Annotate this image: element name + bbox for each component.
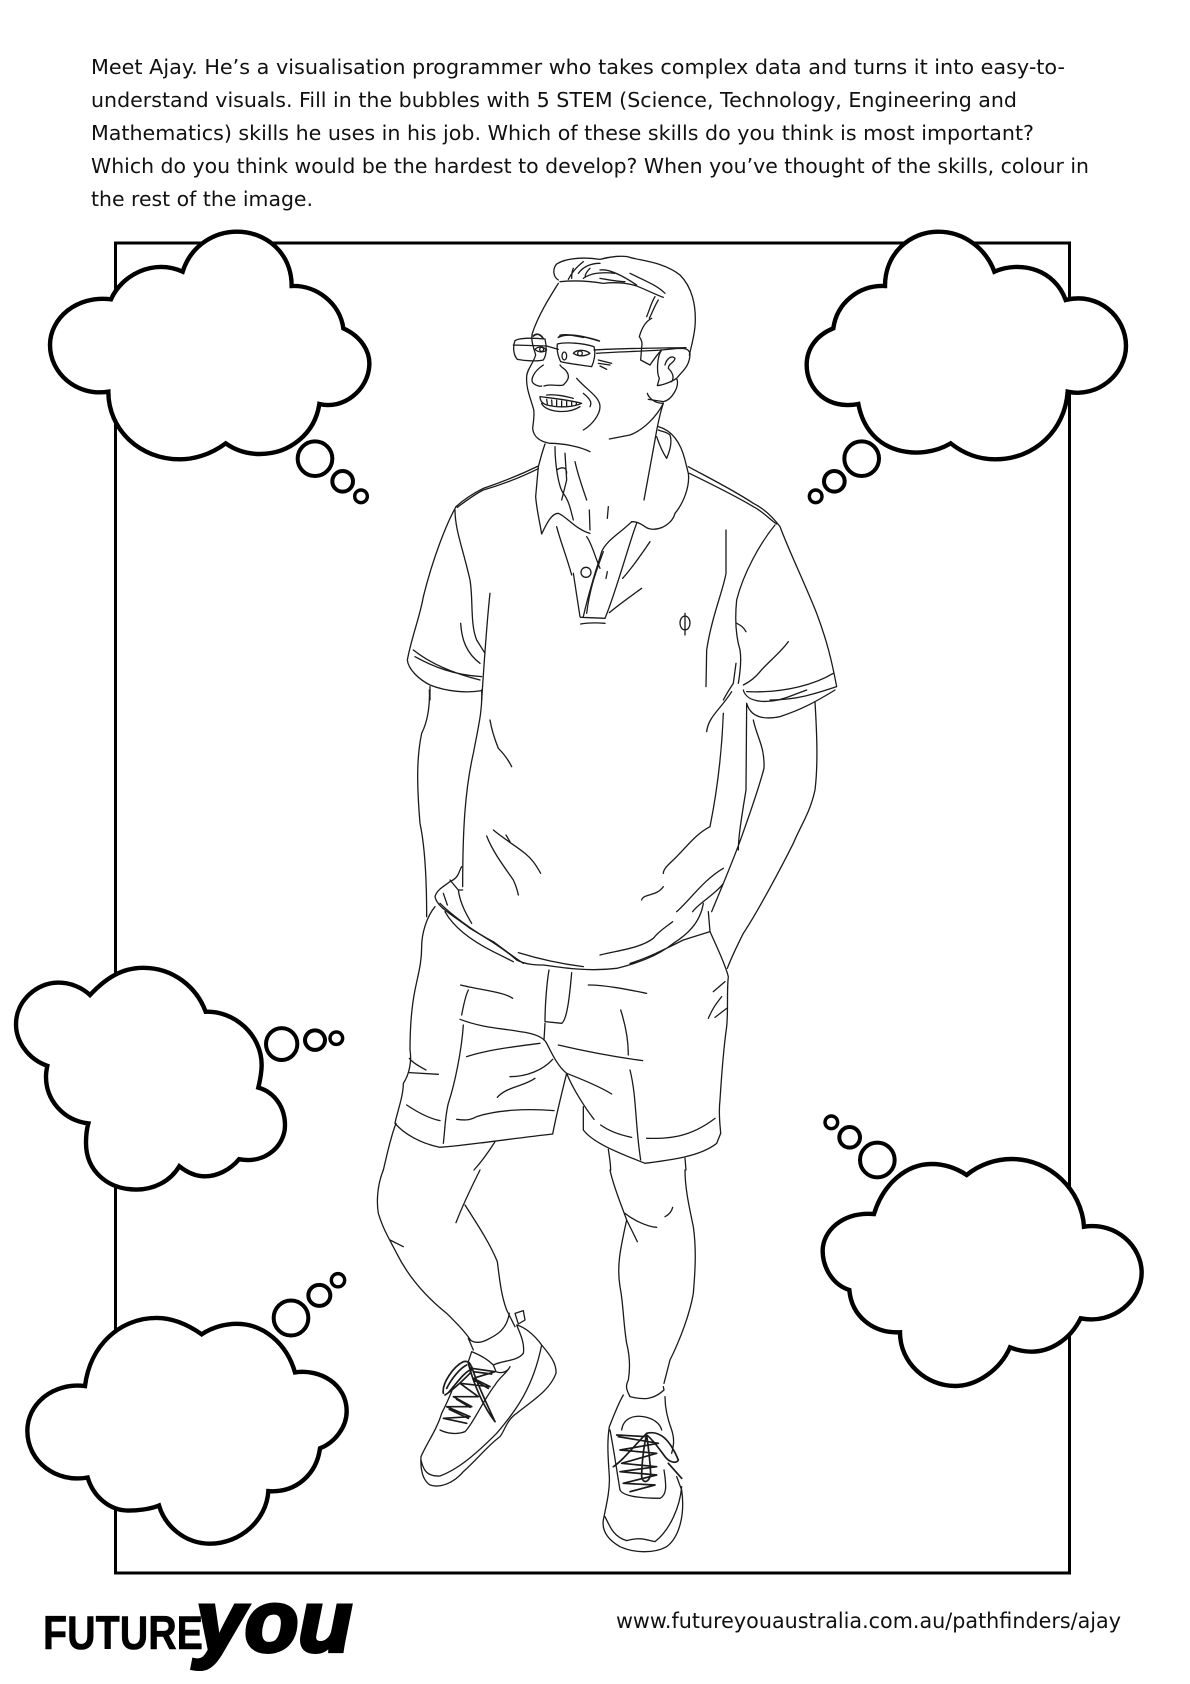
- instructions text block: Which do you think would be the hardest to develop? When you’ve thought of the skills, colour in: [91, 154, 1089, 178]
- website URL: www.futureyouaustralia.com.au/pathfinders/ajay: [616, 1609, 1121, 1634]
- upper legs: [383, 1123, 686, 1170]
- instructions text block: Mathematics) skills he uses in his job. Which of these skills do you think is most important?: [91, 121, 1034, 145]
- FutureYou logo: FUTURE: [43, 1606, 203, 1659]
- instructions text block: Meet Ajay. He’s a visualisation programmer who takes complex data and turns it into easy-to-: [91, 55, 1065, 79]
- thought bubble: middle left: [16, 968, 343, 1190]
- thought bubble: top right: [807, 232, 1126, 503]
- head and upper body: [407, 256, 837, 700]
- arms, torso and shorts: [395, 690, 835, 1163]
- instructions text block: the rest of the image.: [91, 187, 313, 211]
- right shoe laces: [613, 1433, 682, 1492]
- thought bubble: top left: [50, 232, 369, 503]
- instructions text block: [91, 55, 1089, 211]
- left shoe laces: [443, 1361, 495, 1423]
- icon: shirt logo: [680, 613, 690, 635]
- FutureYou logo: [43, 1574, 352, 1670]
- thought bubble: lower right: [823, 1116, 1142, 1386]
- FutureYou logo: you: [192, 1574, 352, 1670]
- picture frame: [116, 243, 1070, 1573]
- thought bubble: bottom left: [27, 1274, 347, 1544]
- lower legs and shoes: [377, 1170, 695, 1552]
- line drawing: Ajay: [377, 256, 837, 1552]
- instructions text block: understand visuals. Fill in the bubbles with 5 STEM (Science, Technology, Engineering and: [91, 88, 1017, 112]
